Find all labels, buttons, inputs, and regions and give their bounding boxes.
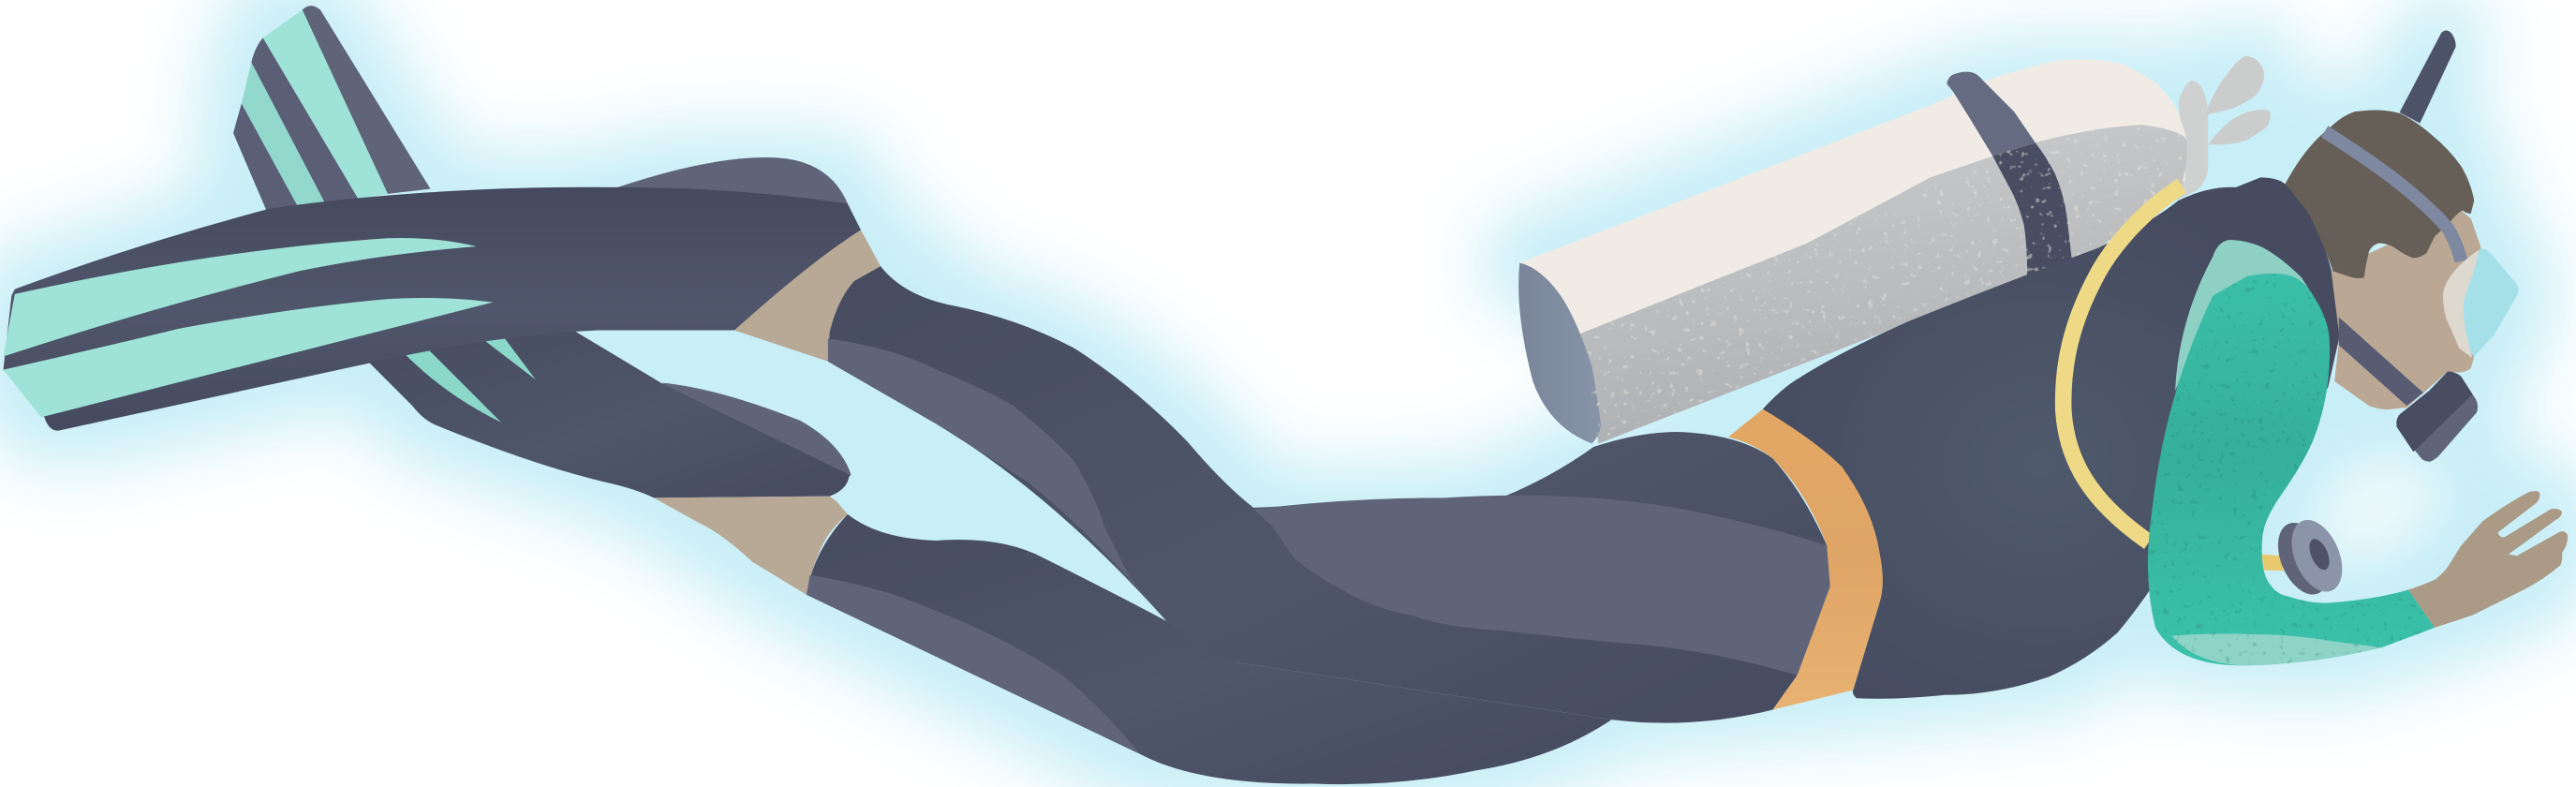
rear fin <box>233 6 431 214</box>
rear fin lower dark band <box>233 103 299 214</box>
arm <box>2136 240 2568 674</box>
mask head strap <box>2325 131 2461 261</box>
valve knob lower <box>2208 110 2271 144</box>
orange belt <box>1728 409 1883 710</box>
hand <box>2408 491 2568 628</box>
lower calf bulge <box>662 383 851 497</box>
mask frame <box>2443 250 2480 358</box>
regulator mouthpiece <box>2396 371 2478 462</box>
valve knob upper <box>2206 56 2264 115</box>
snorkel tube <box>2400 30 2456 124</box>
gauge hose <box>2261 555 2284 571</box>
regulator gauge <box>2261 512 2352 602</box>
lower fin body <box>370 330 850 497</box>
rear fin outer slate band <box>303 6 431 194</box>
thigh and hip dark shape <box>828 266 1830 723</box>
shoulder light teal <box>2175 240 2313 391</box>
front leg and fin body <box>4 187 861 431</box>
lower knee skin <box>654 497 848 595</box>
torso <box>1763 177 2339 699</box>
sleeve speckle <box>2136 263 2448 674</box>
upper calf bulge <box>617 157 848 205</box>
front fin and upper leg <box>4 157 861 431</box>
lower leg: fin section and calf <box>370 330 1612 784</box>
inner thigh lighter strip <box>828 338 1166 621</box>
valve stem <box>2175 81 2208 200</box>
mouthpiece strap <box>2339 317 2423 406</box>
rear fin dark band <box>251 37 358 203</box>
teal sliver left <box>401 347 501 423</box>
tank grey lower <box>1580 125 2187 443</box>
front fin teal blade lower <box>4 298 493 417</box>
gauge centre hole <box>2305 536 2333 572</box>
pale spot in glow near hand <box>2359 457 2445 529</box>
tank strap upper <box>1947 72 2036 156</box>
tank speckle <box>1585 127 2184 438</box>
arm teal sleeve <box>2148 274 2435 665</box>
front fin teal blade upper <box>4 238 477 357</box>
tank cream top <box>1519 59 2186 334</box>
tank end cap <box>1518 263 1601 443</box>
upper knee skin <box>734 230 881 362</box>
rear fin teal band upper <box>263 10 388 199</box>
air tank <box>1512 50 2271 452</box>
yellow air hose <box>2064 186 2182 542</box>
face skin <box>2332 210 2480 409</box>
mask lens <box>2453 248 2519 357</box>
hip lighter panel <box>1253 496 1830 676</box>
gauge rim <box>2268 515 2338 602</box>
gauge face <box>2282 512 2352 600</box>
lower thigh lighter strip <box>807 575 1140 754</box>
rear fin teal band lower <box>242 63 325 209</box>
head <box>2286 30 2519 462</box>
lower thigh <box>807 514 1612 784</box>
regulator front <box>2396 371 2473 452</box>
hair <box>2286 110 2474 278</box>
sleeve lower highlight <box>2172 633 2382 665</box>
teal sliver right <box>480 334 536 379</box>
tank strap lower <box>1992 143 2072 277</box>
upper thigh and hip <box>828 266 1830 723</box>
